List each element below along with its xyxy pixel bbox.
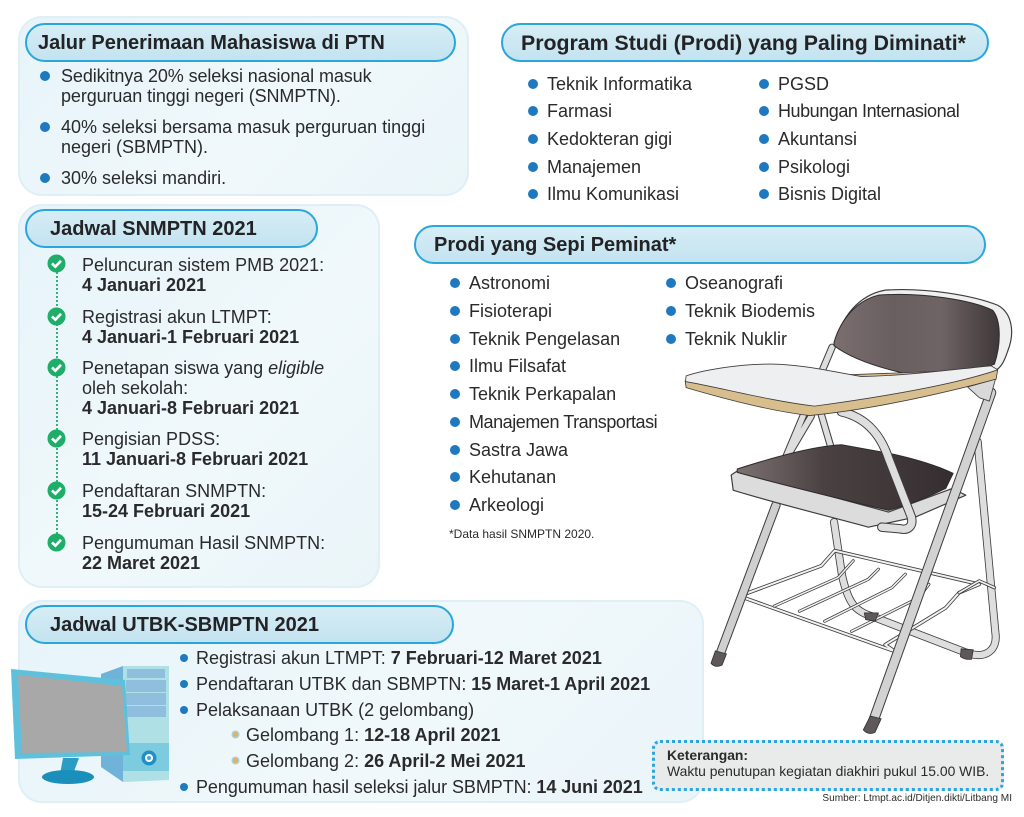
panel: jadwal SNMPTN [18, 204, 380, 588]
heading: prodi sepi peminat: Prodi yang Sepi Peminat* [434, 234, 676, 256]
text: penetapan [82, 358, 324, 418]
seat cushion [737, 445, 953, 510]
list: prodi diminati kolom 1 [528, 74, 692, 204]
list: prodi sepi kolom 1: Fisioterapi [469, 301, 552, 321]
under-seat basket [744, 551, 994, 652]
panel: jalur penerimaan [18, 16, 469, 196]
list: prodi sepi kolom 1: Teknik Pengelasan [469, 329, 620, 349]
icon: check 1 [48, 254, 66, 272]
text: peluncuran: 4 Januari 2021 [82, 275, 206, 295]
timeline line [56, 264, 58, 542]
text: registrasi: 4 Januari-1 Februari 2021 [82, 327, 299, 347]
source credit: Sumber: Ltmpt.ac.id/Ditjen.dikti/Litbang MI [822, 793, 1012, 804]
list: prodi diminati kolom 1: Kedokteran gigi [547, 129, 672, 149]
feet [711, 613, 973, 733]
backrest frame [834, 290, 1012, 371]
footnote: *Data hasil SNMPTN 2020. [449, 527, 594, 541]
list: prodi sepi kolom 2: Oseanografi [685, 273, 783, 293]
list: prodi sepi kolom 1: Manajemen Transportasi [469, 412, 657, 432]
list: prodi diminati kolom 1: Teknik Informatika [547, 74, 692, 94]
list: prodi sepi kolom 1: Teknik Perkapalan [469, 384, 616, 404]
text: pelaksanaan UTBK: Pelaksanaan UTBK (2 gelombang) [196, 700, 474, 720]
text: PDSS [82, 429, 308, 469]
list: prodi diminati kolom 2: Psikologi [778, 157, 850, 177]
panel: jadwal UTBK-SBMPTN [18, 600, 704, 803]
list: prodi diminati kolom 2: PGSD [778, 74, 829, 94]
list: prodi diminati kolom 2: Bisnis Digital [778, 184, 881, 204]
text: SNMPTN quota: perguruan tinggi negeri (SNMPTN). [61, 86, 341, 106]
icon: check 5 [48, 482, 66, 500]
heading: program studi diminati: Program Studi (Prodi) yang Paling Diminati* [521, 31, 966, 55]
list: prodi sepi kolom 2: Teknik Biodemis [685, 301, 815, 321]
callout: keterangan [652, 740, 1004, 791]
heading: jalur penerimaan: Jalur Penerimaan Mahasiswa di PTN [38, 32, 385, 54]
text: penetapan: Penetapan siswa yang eligible [82, 358, 324, 378]
seat frame [731, 471, 966, 527]
front left leg [720, 505, 776, 655]
list: prodi sepi kolom 2 [666, 273, 815, 349]
list: prodi sepi kolom 1: Arkeologi [469, 495, 544, 515]
text: pengumuman: Pengumuman Hasil SNMPTN: [82, 533, 325, 553]
back legs [834, 441, 996, 655]
text: SBMPTN quota: negeri (SBMPTN). [61, 137, 208, 157]
text: gelombang 1: Gelombang 1: 12-18 April 2021 [246, 725, 500, 745]
tablet edge [685, 369, 998, 416]
text: registrasi: Registrasi akun LTMPT: [82, 307, 272, 327]
list: prodi diminati kolom 2: Hubungan Internasional [778, 101, 959, 121]
text: SBMPTN quota [40, 117, 425, 157]
text: SNMPTN quota: Sedikitnya 20% seleksi nasional masuk [61, 66, 371, 86]
list: prodi diminati kolom 1: Ilmu Komunikasi [547, 184, 679, 204]
heading: program studi diminati [501, 23, 989, 62]
text: registrasi [82, 307, 299, 347]
list: prodi diminati kolom 2: Akuntansi [778, 129, 857, 149]
list: prodi diminati kolom 2 [759, 74, 959, 204]
text: gelombang 2: Gelombang 2: 26 April-2 Mei 2021 [246, 751, 526, 771]
callout text: Waktu penutupan kegiatan diakhiri pukul 15.00 WIB. [667, 763, 989, 779]
text: penetapan: oleh sekolah: [82, 378, 188, 398]
text: PDSS: Pengisian PDSS: [82, 429, 220, 449]
icon: check 4 [48, 430, 66, 448]
heading: jadwal UTBK: Jadwal UTBK-SBMPTN 2021 [50, 614, 319, 636]
text: mandiri quota: 30% seleksi mandiri. [61, 168, 226, 188]
text: PDSS: 11 Januari-8 Februari 2021 [82, 449, 308, 469]
text: pengumuman [82, 533, 325, 573]
text: peluncuran: Peluncuran sistem PMB 2021: [82, 255, 324, 275]
icon: desktop computer [11, 666, 169, 784]
list: prodi sepi kolom 1: Sastra Jawa [469, 440, 568, 460]
list: prodi sepi kolom 1 [450, 273, 657, 515]
list: prodi sepi kolom 1: Astronomi [469, 273, 550, 293]
icon: check 6 [48, 534, 66, 552]
heading: jadwal SNMPTN [25, 209, 318, 248]
list: prodi sepi kolom 2: Teknik Nuklir [685, 329, 787, 349]
callout label: Keterangan: [667, 747, 748, 763]
text: peluncuran [82, 255, 324, 295]
text: SNMPTN quota [40, 66, 371, 106]
illustration: folding chair with tablet [684, 289, 1012, 734]
text: pendaftaran: 15-24 Februari 2021 [82, 501, 250, 521]
text: pendaftaran [82, 481, 266, 521]
text: pendaftaran: Pendaftaran SNMPTN: [82, 481, 266, 501]
text: registrasi akun: Registrasi akun LTMPT: 7 Februari-12 Maret 2021 [196, 648, 602, 668]
heading: prodi sepi peminat [414, 225, 986, 264]
list: prodi diminati kolom 1: Manajemen [547, 157, 641, 177]
upper left tube [786, 347, 832, 457]
heading: jadwal UTBK [25, 605, 454, 644]
list: prodi diminati kolom 1: Farmasi [547, 101, 612, 121]
backrest cushion [834, 294, 999, 374]
tablet bracket [968, 379, 995, 401]
icon: check 2 [48, 308, 66, 326]
text: pengumuman hasil: Pengumuman hasil seleksi jalur SBMPTN: 14 Juni 2021 [196, 777, 643, 797]
text: penetapan: 4 Januari-8 Februari 2021 [82, 398, 299, 418]
icon: check 3 [48, 358, 66, 376]
front right long leg [872, 393, 991, 725]
heading: jalur penerimaan [25, 23, 456, 62]
text: pendaftaran UTBK: Pendaftaran UTBK dan SBMPTN: 15 Maret-1 April 2021 [196, 674, 650, 694]
heading: jadwal SNMPTN: Jadwal SNMPTN 2021 [50, 218, 257, 240]
text: SBMPTN quota: 40% seleksi bersama masuk perguruan tinggi [61, 117, 425, 137]
list: prodi sepi kolom 1: Ilmu Filsafat [469, 356, 566, 376]
armrest [841, 412, 912, 529]
list: prodi sepi kolom 1: Kehutanan [469, 467, 556, 487]
tablet top [685, 364, 998, 406]
text: pengumuman: 22 Maret 2021 [82, 553, 200, 573]
